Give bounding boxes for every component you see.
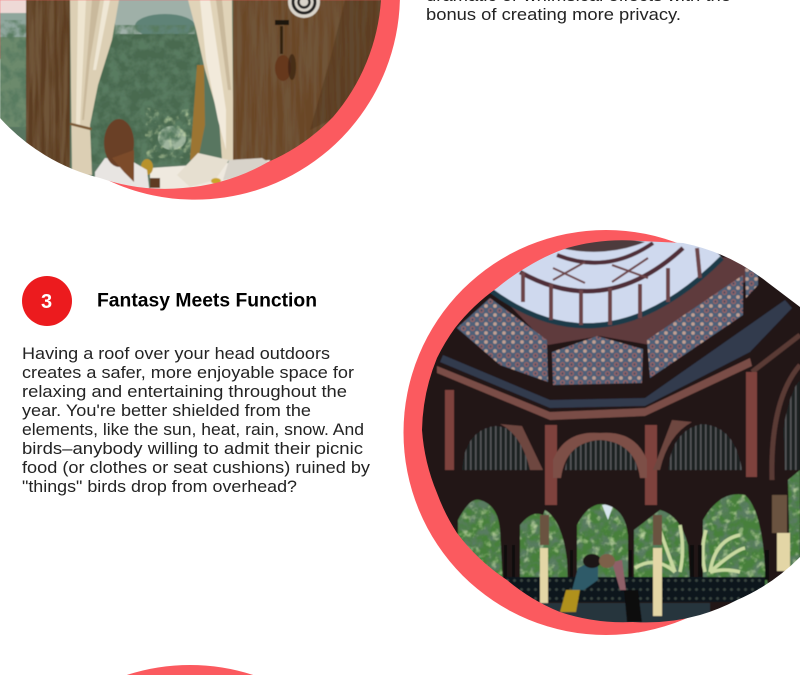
cornice bands: [437, 300, 792, 420]
palm fronds: [635, 525, 745, 572]
section 3 body text: year. You're better shielded from the: [22, 401, 311, 420]
section 3 number badge: 3: [41, 291, 52, 313]
coral backing circle: [0, 0, 400, 200]
garden openings: [450, 470, 800, 590]
section 3 body text: "things" birds drop from overhead?: [22, 477, 297, 496]
photo: woman looking out over a jungle from a wooden pavilion: [0, 0, 390, 195]
top decorative photo circle: [0, 0, 400, 200]
railing: [505, 577, 540, 602]
section 3 photo circle: [404, 230, 800, 635]
wooden post: [26, 0, 70, 170]
next section photo circle, clipped at bottom: [127, 665, 253, 675]
section 3 body text: Having a roof over your head outdoors: [22, 344, 330, 363]
section 3 body text: creates a safer, more enjoyable space for: [22, 363, 354, 382]
section 3 heading: Fantasy Meets Function: [97, 290, 317, 312]
clipped body text top right: bonus of creating more privacy.: [426, 5, 681, 24]
wood wall: [233, 0, 385, 172]
bamboo pole: [190, 65, 205, 160]
glass dome: [490, 232, 722, 326]
right side bay arches: [752, 335, 800, 480]
tile panels: [457, 268, 758, 385]
left curtain: [70, 0, 119, 175]
arch roofs: [462, 380, 800, 478]
section 3 body text: relaxing and entertaining throughout the: [22, 382, 347, 401]
section 3 body text: elements, like the sun, heat, rain, snow. And: [22, 420, 364, 439]
section 3 body text: food (or clothes or seat cushions) ruined by: [22, 458, 371, 477]
red pillars: [445, 372, 757, 505]
ukulele: [275, 20, 296, 81]
cream and dark columns: [504, 495, 790, 616]
floor: [542, 602, 710, 622]
section 3 number badge: [22, 276, 72, 326]
round wall target: [288, 0, 320, 18]
coral backing circle: [404, 230, 800, 635]
daybed and pillows: [149, 159, 271, 189]
clipped body text top right: [426, 0, 731, 24]
woman: [94, 157, 150, 188]
two figures: [560, 554, 642, 622]
right curtain: [188, 0, 237, 160]
photo: ornate Moorish kiosk with glass dome: [410, 232, 800, 632]
brown spandrels behind the tile panels: [511, 256, 748, 346]
section 3 body text: birds–anybody willing to admit their picnic: [22, 439, 364, 458]
section 3 body text: [22, 344, 371, 496]
